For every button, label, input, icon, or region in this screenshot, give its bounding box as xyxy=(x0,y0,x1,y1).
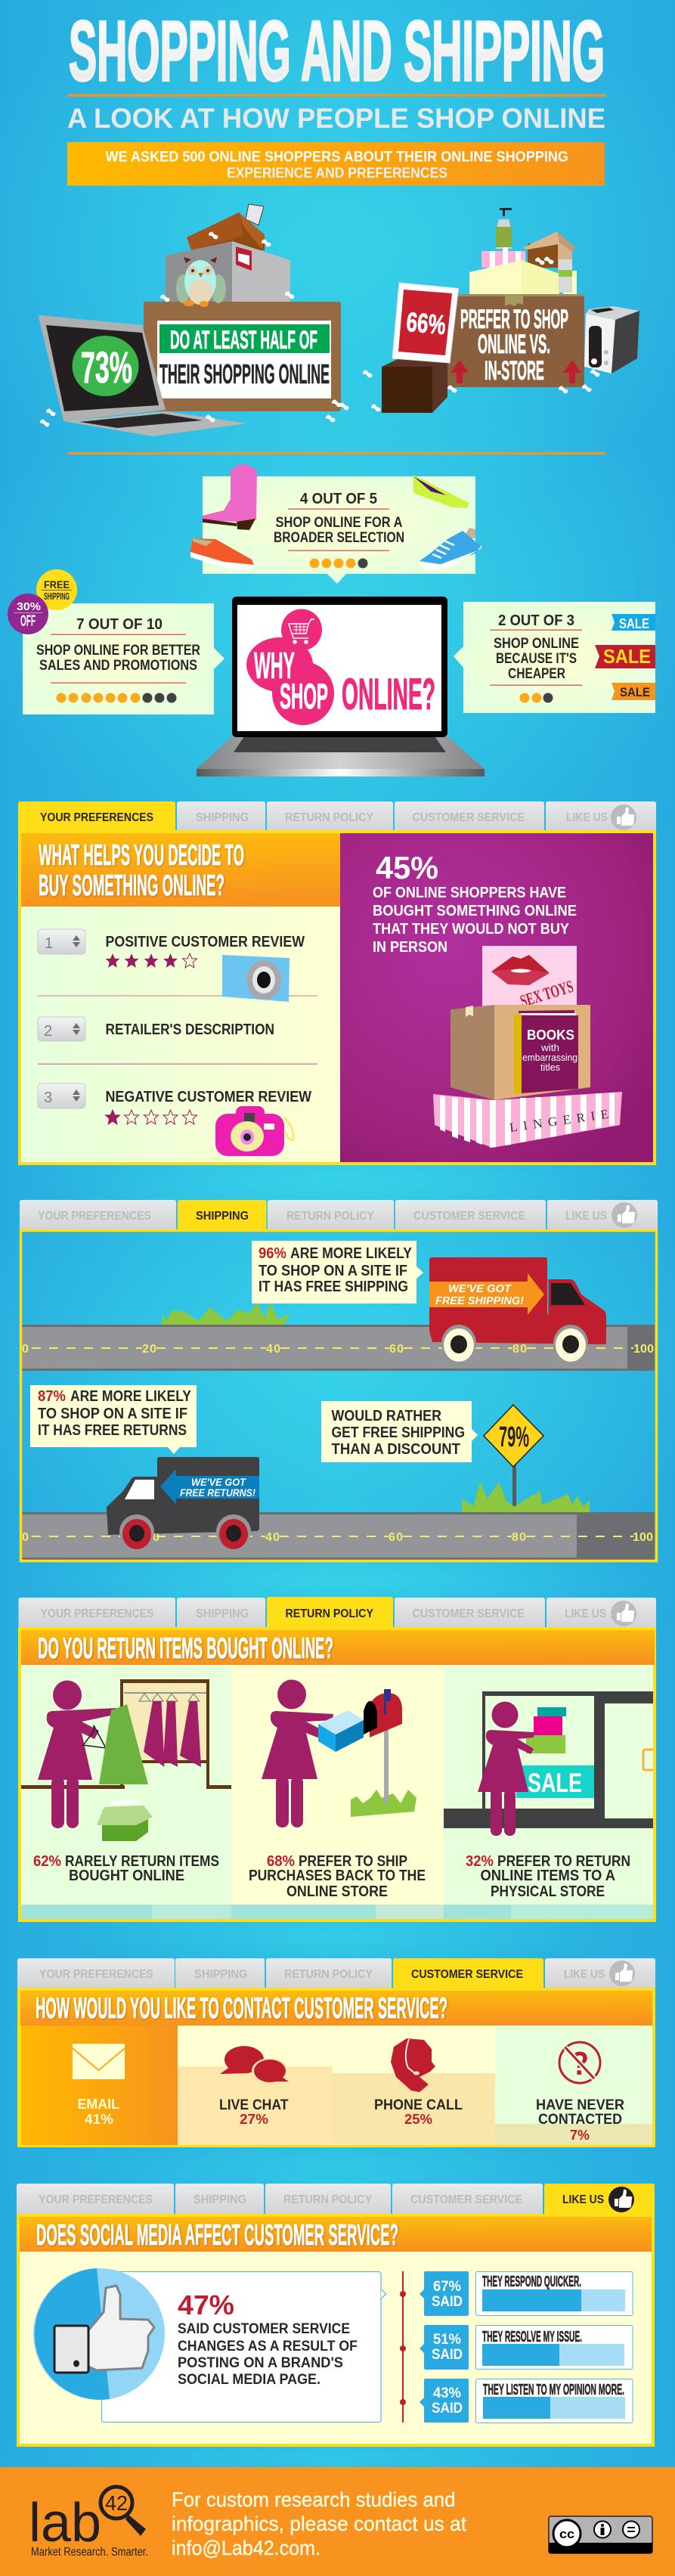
tabs: SHIPPING xyxy=(196,811,249,824)
icon: big brown box: THEIR SHOPPING ONLINE xyxy=(159,358,330,389)
road bottom: 0 xyxy=(22,1531,29,1544)
icon: creative commons badge: cc xyxy=(559,2527,574,2541)
option: never contacted xyxy=(495,2026,652,2145)
icon: parcel xyxy=(318,1710,364,1752)
right panel: BOUGHT SOMETHING ONLINE xyxy=(373,903,577,919)
closet xyxy=(21,1679,231,1789)
icon: green box xyxy=(97,1800,153,1841)
card: 47 percent: SOCIAL MEDIA PAGE. xyxy=(178,2372,320,2388)
icon: cream box xyxy=(469,260,577,294)
contact text: For custom research studies and xyxy=(172,2488,455,2511)
stat: 73 percent box stack xyxy=(39,204,341,436)
box: lingerie xyxy=(433,1092,622,1148)
tabs: YOUR PREFERENCES xyxy=(40,811,153,824)
tabs xyxy=(17,1958,655,1988)
tabs: YOUR PREFERENCES xyxy=(41,1607,154,1620)
stat: 67 percent: THEY RESPOND QUICKER. xyxy=(482,2274,581,2290)
icon: green flat shoe xyxy=(413,475,469,508)
progress bar xyxy=(231,1905,444,1919)
rank 1 xyxy=(38,929,305,968)
box with book: embarrassing xyxy=(522,1052,577,1063)
divider xyxy=(67,452,605,454)
tabs: RETURN POLICY xyxy=(283,2193,372,2206)
callout: would rather: GET FREE SHIPPING xyxy=(331,1424,465,1441)
right panel: THAT THEY WOULD NOT BUY xyxy=(373,921,570,938)
column: rarely return: RARELY RETURN ITEMS xyxy=(65,1853,219,1870)
figure: woman with dress xyxy=(38,1680,116,1828)
option: phone call: 25% xyxy=(404,2112,432,2127)
icon: big brown box: DO AT LEAST HALF OF xyxy=(170,326,317,355)
column: ship back: PURCHASES BACK TO THE xyxy=(249,1868,426,1884)
option: email: 41% xyxy=(85,2112,113,2127)
bar xyxy=(482,2344,624,2366)
icon: no question mark xyxy=(559,2042,600,2083)
tabs: CUSTOMER SERVICE xyxy=(413,1607,525,1620)
free shipping arrow xyxy=(429,1273,544,1315)
icon: blue sneaker xyxy=(419,528,481,571)
icon: main box: ONLINE VS. xyxy=(478,330,550,359)
icon: creative commons badge xyxy=(549,2516,652,2553)
tabs xyxy=(18,1597,656,1627)
tabs: RETURN POLICY xyxy=(285,811,373,824)
rank 3: NEGATIVE CUSTOMER REVIEW xyxy=(106,1089,311,1105)
divider xyxy=(67,94,605,97)
road top: 60 xyxy=(389,1343,404,1356)
icon: pink camera xyxy=(215,1106,293,1156)
grass xyxy=(162,1303,290,1325)
icon: dark truck xyxy=(107,1457,259,1549)
callout: 2 out of 3: SHOP ONLINE xyxy=(494,636,579,652)
poster: sex toys: SEX TOYS xyxy=(518,977,575,1011)
tabs: CUSTOMER SERVICE xyxy=(411,1968,523,1981)
question header xyxy=(21,833,340,907)
tabs: CUSTOMER SERVICE xyxy=(410,2193,522,2206)
icon: no question mark: ? xyxy=(571,2045,589,2082)
icon: pink boot xyxy=(203,464,257,530)
rank 2: RETAILER'S DESCRIPTION xyxy=(106,1021,274,1038)
question header: BUY SOMETHING ONLINE? xyxy=(39,870,224,902)
section: customer service xyxy=(17,1958,655,2147)
column: ship back xyxy=(231,1665,444,1919)
road top: 40 xyxy=(266,1343,280,1356)
callout: 96 percent: 96% xyxy=(259,1245,286,1262)
road sign: 79 percent xyxy=(484,1405,543,1506)
rating dots xyxy=(310,558,367,569)
storefront xyxy=(444,1691,653,1828)
rank 1: POSITIVE CUSTOMER REVIEW xyxy=(106,934,305,950)
callout: 87 percent xyxy=(30,1385,197,1454)
panel frame xyxy=(18,830,656,1165)
why shop circles: WHY xyxy=(254,646,295,687)
rank 1: 1 xyxy=(45,935,53,952)
callout: 2 out of 3: CHEAPER xyxy=(508,666,565,682)
box with book: with xyxy=(540,1042,559,1053)
intro banner: EXPERIENCE AND PREFERENCES xyxy=(227,165,447,181)
logo: lab42: lab xyxy=(29,2493,101,2553)
bar xyxy=(482,2289,625,2311)
box: lingerie: LINGERIE xyxy=(509,1107,609,1135)
option: live chat: LIVE CHAT xyxy=(219,2097,289,2113)
progress bar xyxy=(21,1905,231,1919)
icon: grey box xyxy=(166,241,290,302)
question header: DO YOU RETURN ITEMS BOUGHT ONLINE? xyxy=(38,1632,333,1665)
sticker: 30 percent off: OFF xyxy=(20,612,36,630)
intro banner xyxy=(67,142,605,186)
figure: woman with parcel xyxy=(262,1680,333,1827)
contact text: info@Lab42.com. xyxy=(172,2537,320,2559)
grass xyxy=(462,1482,590,1512)
tabs xyxy=(20,1200,658,1229)
callout: 7 out of 10 xyxy=(8,569,224,715)
laptop base xyxy=(197,736,485,777)
truck wheels xyxy=(441,1325,588,1362)
left panel xyxy=(21,833,340,1162)
callout: 7 out of 10: SALES AND PROMOTIONS xyxy=(39,658,197,674)
icon: main box: IN-STORE xyxy=(485,356,544,386)
card: 47 percent: CHANGES AS A RESULT OF xyxy=(178,2339,358,2354)
panel frame xyxy=(17,2214,655,2447)
icon: toaster xyxy=(584,306,639,374)
stat: 67 percent: SAID xyxy=(432,2294,463,2310)
callout: 87 percent: ARE MORE LIKELY xyxy=(70,1388,192,1405)
stat: 43 percent xyxy=(420,2379,633,2423)
road bottom: 80 xyxy=(512,1531,526,1544)
box with book xyxy=(451,1005,590,1100)
icon: thumbs up circle xyxy=(33,2268,165,2400)
icon: mailbox xyxy=(364,1689,402,1803)
truck wheels xyxy=(119,1514,251,1549)
rank 3: 3 xyxy=(44,1090,52,1106)
icon: main box xyxy=(447,294,584,387)
road sign: 79 percent: 79% xyxy=(499,1421,529,1453)
tabs xyxy=(17,2184,655,2214)
icon: phone xyxy=(246,204,264,225)
rank 2: 2 xyxy=(44,1023,52,1040)
column: return to store: 32% xyxy=(466,1853,494,1870)
road bottom xyxy=(21,1512,655,1560)
section: your preferences xyxy=(18,801,656,1165)
tabs: RETURN POLICY xyxy=(286,1607,373,1620)
callout: 96 percent: TO SHOP ON A SITE IF xyxy=(259,1263,407,1279)
free shipping arrow: FREE SHIPPING! xyxy=(435,1294,524,1307)
panel frame xyxy=(21,1231,656,1561)
icon: owl toy xyxy=(176,257,226,307)
panel frame xyxy=(17,1988,655,2147)
tabs: SHIPPING xyxy=(194,2193,246,2206)
option: live chat: 27% xyxy=(240,2112,268,2127)
callout: 2 out of 3 xyxy=(454,602,655,713)
tabs: LIKE US xyxy=(566,811,608,824)
tabs: SHIPPING xyxy=(196,1607,249,1620)
card: 47 percent: POSTING ON A BRAND'S xyxy=(178,2355,343,2371)
stat: 51 percent xyxy=(420,2325,633,2370)
icon: big brown box xyxy=(144,302,341,411)
logo: lab42: Market Research. Smarter. xyxy=(31,2546,148,2559)
column: ship back: 68% xyxy=(267,1853,295,1870)
icon: laptop with 73 percent xyxy=(39,315,247,436)
stars: 4 of 5 xyxy=(106,953,197,968)
right panel: IN PERSON xyxy=(373,939,447,956)
icon: tablet xyxy=(392,283,458,363)
stat: 66 percent box stack xyxy=(382,208,639,413)
icon: up arrow xyxy=(451,360,469,383)
road top: 0 xyxy=(22,1343,29,1356)
road bottom: 100 xyxy=(633,1531,653,1544)
sticker: 30 percent off xyxy=(8,594,48,634)
option: phone call xyxy=(333,2026,495,2145)
laptop screen xyxy=(232,597,447,737)
column: ship back: PREFER TO SHIP xyxy=(299,1853,407,1870)
icon: headset head xyxy=(391,2038,435,2092)
icon: chat bubbles xyxy=(220,2046,289,2084)
stat: 51 percent: 51% xyxy=(433,2332,461,2348)
tabs: CUSTOMER SERVICE xyxy=(413,811,525,824)
callout: 87 percent: IT HAS FREE RETURNS xyxy=(38,1422,187,1439)
icon: grass xyxy=(351,1790,416,1817)
icon: brown box xyxy=(187,212,265,250)
column: return to store: PREFER TO RETURN xyxy=(497,1853,630,1870)
panel frame xyxy=(18,1627,656,1922)
icon: blue camera xyxy=(222,955,290,1002)
intro banner: WE ASKED 500 ONLINE SHOPPERS ABOUT THEIR ONLINE SHOPPING xyxy=(106,148,568,165)
stat: 51 percent: SAID xyxy=(432,2347,463,2363)
sticker: 30 percent off: 30% xyxy=(17,600,41,613)
callout: 7 out of 10: 7 OUT OF 10 xyxy=(76,616,163,633)
column: rarely return: 62% xyxy=(33,1853,61,1870)
tabs: LIKE US xyxy=(565,1607,606,1620)
stat: 67 percent xyxy=(420,2271,633,2316)
icon: envelope xyxy=(73,2044,125,2079)
why shop online laptop xyxy=(197,597,485,777)
free shipping arrow: WE'VE GOT xyxy=(448,1282,512,1295)
callout: 87 percent: TO SHOP ON A SITE IF xyxy=(38,1406,187,1422)
stat: 43 percent: 43% xyxy=(433,2385,461,2401)
section: shipping xyxy=(20,1200,658,1561)
callout: would rather xyxy=(321,1401,478,1462)
stat: 51 percent: THEY RESOLVE MY ISSUE. xyxy=(482,2329,582,2345)
icon: dark box xyxy=(382,358,447,413)
road top: 100 xyxy=(633,1343,654,1356)
right panel xyxy=(340,833,653,1162)
why shop circles xyxy=(246,609,435,725)
rating dots xyxy=(520,693,553,703)
icon: open brown box xyxy=(522,231,576,287)
callout: would rather: THAN A DISCOUNT xyxy=(331,1441,460,1458)
box with book: titles xyxy=(540,1062,560,1073)
callout: 96 percent xyxy=(252,1241,423,1303)
tag: orange sale xyxy=(612,683,655,700)
free returns arrow xyxy=(160,1469,259,1505)
free returns arrow: WE'VE GOT xyxy=(191,1476,246,1488)
bar xyxy=(483,2397,625,2419)
road top: 20 xyxy=(142,1343,156,1356)
rank 2 xyxy=(38,1017,274,1041)
road bottom: 20 xyxy=(145,1531,159,1544)
option: live chat xyxy=(178,2026,333,2145)
tabs: SHIPPING xyxy=(196,1210,249,1223)
road bottom: 60 xyxy=(389,1531,403,1544)
icon: tube xyxy=(559,259,572,293)
free returns arrow: FREE RETURNS! xyxy=(180,1486,255,1499)
callout: 4 out of 5: 4 OUT OF 5 xyxy=(300,491,377,507)
tabs xyxy=(18,801,656,830)
tabs: SHIPPING xyxy=(194,1968,248,1981)
box with book: BOOKS xyxy=(527,1028,574,1043)
road top xyxy=(21,1325,655,1371)
option: email: EMAIL xyxy=(77,2097,119,2112)
footer xyxy=(0,2467,675,2576)
icon: pink gift box xyxy=(481,247,525,268)
timeline xyxy=(400,2271,406,2423)
sticker: free shipping: FREE xyxy=(44,578,70,591)
right panel: 45% xyxy=(376,850,438,885)
icon: orange slip-on shoe xyxy=(190,538,254,570)
contact text xyxy=(172,2488,466,2559)
option: phone call: PHONE CALL xyxy=(374,2097,463,2113)
option: never contacted: 7% xyxy=(570,2128,590,2143)
right panel: OF ONLINE SHOPPERS HAVE xyxy=(373,885,566,901)
logo: lab42: 42 xyxy=(105,2491,128,2515)
callout: 96 percent: IT HAS FREE SHIPPING xyxy=(259,1279,408,1295)
icon: shopping cart xyxy=(289,619,314,643)
logo: lab42 xyxy=(29,2487,148,2559)
rating dots xyxy=(56,693,177,703)
why shop circles: SHOP xyxy=(280,676,328,716)
card: 47 percent: 47% xyxy=(178,2289,234,2320)
road top: 80 xyxy=(512,1343,527,1356)
section: like us xyxy=(17,2184,655,2447)
sticker: free shipping xyxy=(36,569,77,610)
icon: pump bottle xyxy=(496,208,512,249)
subtitle: A LOOK AT HOW PEOPLE SHOP ONLINE xyxy=(67,103,605,134)
tabs: LIKE US xyxy=(565,1210,607,1223)
road bottom: 40 xyxy=(265,1531,280,1544)
callout: 4 out of 5: SHOP ONLINE FOR A xyxy=(275,515,403,531)
tabs: RETURN POLICY xyxy=(284,1968,373,1981)
why shop online laptop: ONLINE? xyxy=(342,670,435,719)
progress bar xyxy=(444,1905,653,1919)
callout: 7 out of 10: SHOP ONLINE FOR BETTER xyxy=(36,643,200,659)
column: ship back: ONLINE STORE xyxy=(286,1883,388,1900)
rank 3 xyxy=(38,1083,311,1124)
option: never contacted: HAVE NEVER xyxy=(536,2097,624,2113)
sticker: free shipping: SHIPPING xyxy=(44,591,70,602)
tag: blue sale: SALE xyxy=(619,616,649,631)
option: email xyxy=(21,2026,178,2145)
stat: 43 percent: SAID xyxy=(432,2401,463,2416)
packing peanuts xyxy=(447,257,600,393)
icon: stacked boxes xyxy=(526,1707,566,1753)
callout: 2 out of 3: 2 OUT OF 3 xyxy=(498,612,574,629)
tabs: YOUR PREFERENCES xyxy=(39,2193,153,2206)
tabs: YOUR PREFERENCES xyxy=(39,1968,153,1981)
tabs: RETURN POLICY xyxy=(286,1210,374,1223)
tabs: LIKE US xyxy=(562,2193,604,2206)
column: rarely return: BOUGHT ONLINE xyxy=(69,1868,184,1884)
callout: 87 percent: 87% xyxy=(38,1388,66,1405)
packing peanuts xyxy=(40,231,381,426)
callout: 4 out of 5: BROADER SELECTION xyxy=(274,530,404,546)
callout: 96 percent: ARE MORE LIKELY xyxy=(290,1245,413,1262)
tag: orange sale: SALE xyxy=(620,685,650,699)
column: return to store xyxy=(444,1665,653,1919)
poster: sex toys xyxy=(482,946,577,1011)
icon: green dress xyxy=(99,1704,148,1784)
sale sign: SALE xyxy=(528,1768,582,1798)
icon: tablet: 66% xyxy=(405,306,447,340)
option: never contacted: CONTACTED xyxy=(538,2112,622,2128)
icon: up arrow xyxy=(563,360,581,383)
figure: woman with boxes xyxy=(478,1701,534,1836)
column: return to store: ONLINE ITEMS TO A xyxy=(481,1868,615,1884)
callout: would rather: WOULD RATHER xyxy=(331,1408,441,1424)
card: 47 percent xyxy=(101,2271,386,2423)
column: return to store: PHYSICAL STORE xyxy=(491,1883,605,1900)
icon: hanger xyxy=(83,1725,106,1748)
question header: WHAT HELPS YOU DECIDE TO xyxy=(39,839,244,872)
tabs: YOUR PREFERENCES xyxy=(38,1210,151,1223)
tag: red sale: SALE xyxy=(603,645,651,668)
tabs: LIKE US xyxy=(564,1968,605,1981)
stat: 67 percent: 67% xyxy=(433,2279,461,2295)
callout: 4 out of 5 xyxy=(190,464,481,584)
section: return policy xyxy=(18,1597,656,1922)
stars: 1 of 5 xyxy=(106,1110,197,1124)
column: rarely return xyxy=(21,1665,231,1919)
callout: 2 out of 3: BECAUSE IT'S xyxy=(496,651,577,667)
tabs: CUSTOMER SERVICE xyxy=(413,1210,525,1223)
contact text: infographics, please contact us at xyxy=(172,2512,466,2535)
icon: laptop with 73 percent: 73% xyxy=(81,343,132,392)
icon: red truck xyxy=(429,1257,606,1362)
card: 47 percent: SAID CUSTOMER SERVICE xyxy=(178,2321,350,2337)
